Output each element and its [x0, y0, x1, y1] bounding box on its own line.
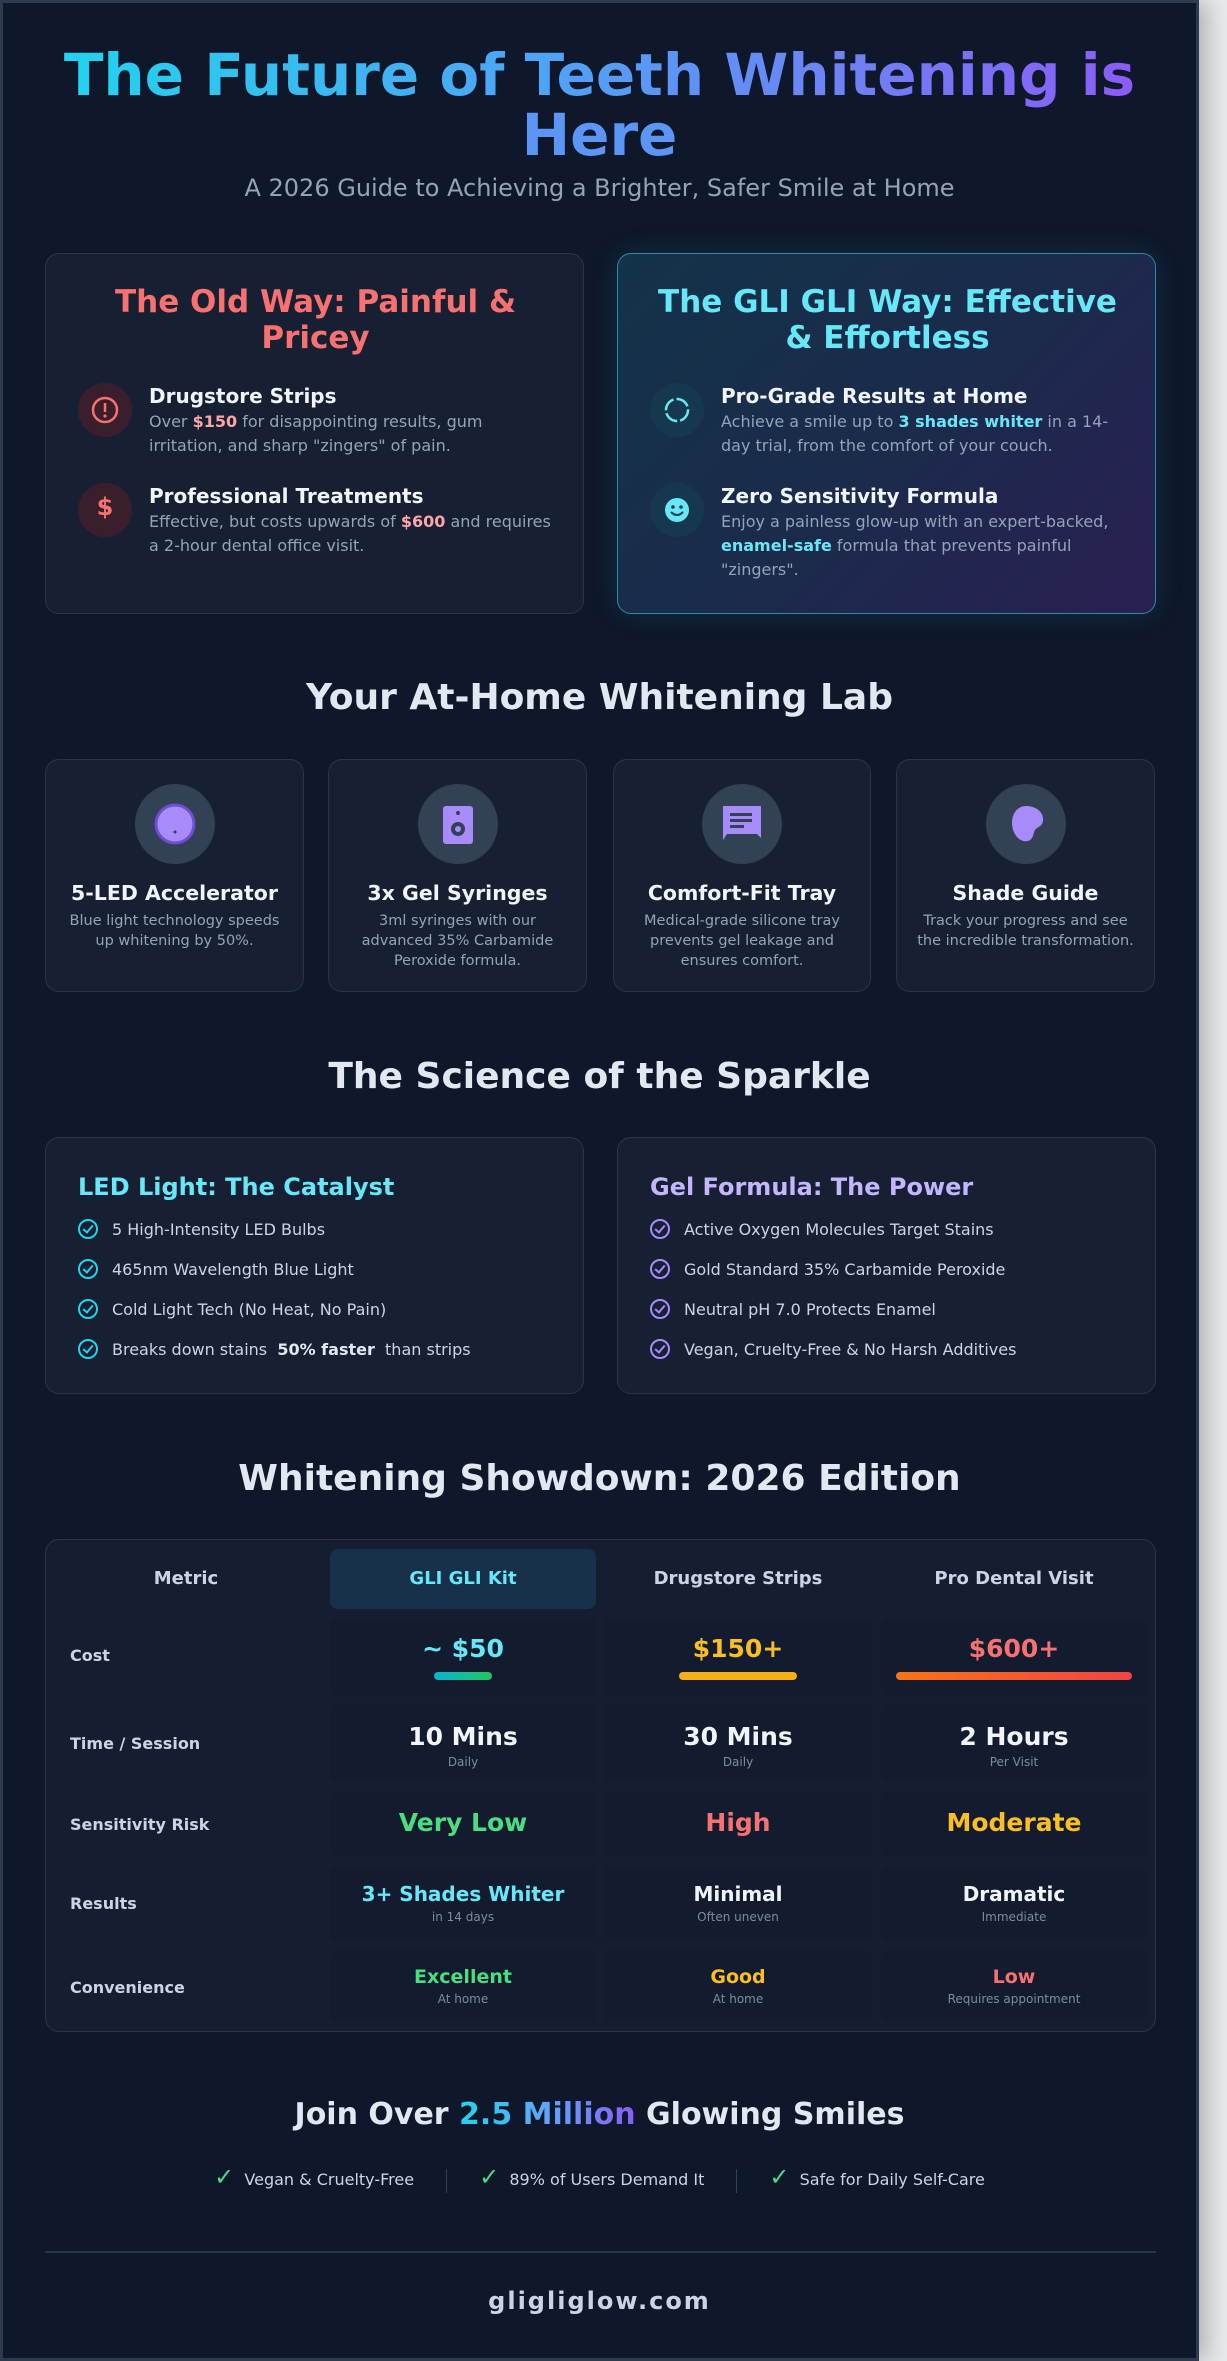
list: LED features: 5 High-Intensity LED Bulbs — [112, 1220, 325, 1239]
item: zero sensitivity: Zero Sensitivity Formula — [721, 484, 998, 508]
heading: lab: Your At-Home Whitening Lab — [306, 677, 893, 718]
row: time: 30 Mins — [683, 1722, 793, 1751]
panel: old way — [45, 253, 584, 614]
table header: GLI GLI Kit — [409, 1568, 517, 1589]
product card: syringes: 3ml syringes with our advanced 35% Carbamide Peroxide formula. — [362, 913, 553, 969]
footer url: gligliglow.com — [488, 2287, 711, 2315]
row: results: Often uneven — [697, 1910, 779, 1924]
table header — [154, 1549, 1094, 1609]
row: convenience: Requires appointment — [948, 1992, 1080, 2006]
product card: tray: Medical-grade silicone tray prevents gel leakage and ensures comfort. — [644, 913, 840, 969]
row: convenience: At home — [713, 1992, 763, 2006]
row: sensitivity: High — [705, 1808, 771, 1837]
panel: gel formula — [617, 1137, 1156, 1394]
product card: syringes: 3x Gel Syringes — [367, 881, 548, 905]
list: LED features: 465nm Wavelength Blue Light — [112, 1260, 354, 1279]
product card: shade guide: Track your progress and see the incredible transformation. — [917, 913, 1134, 949]
row: convenience: Good — [710, 1966, 766, 1988]
item: professional treatments — [149, 484, 551, 555]
icon: syringe — [418, 784, 498, 864]
title — [64, 41, 1135, 169]
product card: LED: Blue light technology speeds up whitening by 50%. — [70, 913, 279, 949]
icon: tray — [702, 784, 782, 864]
product card: LED — [45, 759, 304, 992]
list: LED features: Breaks down stains 50% faster than strips — [112, 1340, 471, 1359]
row: sensitivity — [70, 1808, 1082, 1837]
row: convenience: Low — [993, 1966, 1035, 1988]
row: results: Results — [70, 1894, 137, 1913]
row: convenience: Convenience — [70, 1978, 185, 1997]
row: sensitivity: Very Low — [399, 1808, 527, 1837]
heading: showdown: Whitening Showdown: 2026 Edition — [238, 1458, 961, 1499]
old way heading: The Old Way: Painful & — [115, 284, 516, 320]
row: cost — [70, 1634, 1132, 1680]
product card: shade guide: Shade Guide — [953, 881, 1098, 905]
icon: warning — [78, 383, 132, 437]
product card: shade guide — [896, 759, 1155, 992]
row: results: Minimal — [693, 1882, 783, 1906]
table header: Pro Dental Visit — [934, 1568, 1094, 1589]
panel: LED light — [45, 1137, 584, 1394]
row: results: in 14 days — [432, 1910, 494, 1924]
product card: LED: 5-LED Accelerator — [71, 881, 278, 905]
list: gel features: Active Oxygen Molecules Target Stains — [684, 1220, 994, 1239]
GLI heading — [658, 284, 1117, 356]
row: results: Dramatic — [963, 1882, 1065, 1906]
icon: led — [134, 784, 214, 864]
row: cost: $600+ — [969, 1634, 1059, 1663]
heading: social proof: Join Over 2.5 Million Glowing Smiles — [295, 2097, 904, 2132]
icon: money — [78, 483, 132, 537]
item: drugstore strips: Drugstore Strips — [149, 384, 337, 408]
row: convenience: Excellent — [414, 1966, 512, 1988]
row: cost: Cost — [70, 1646, 110, 1665]
item: pro-grade — [721, 384, 1108, 455]
panel: GLI GLI way — [617, 253, 1156, 614]
row: time: Daily — [723, 1755, 753, 1769]
item: drugstore strips — [149, 384, 482, 455]
list: LED features — [78, 1219, 471, 1359]
icon: refresh — [650, 383, 704, 437]
row: sensitivity: Sensitivity Risk — [70, 1815, 209, 1834]
list: LED features: Cold Light Tech (No Heat, No Pain) — [112, 1300, 386, 1319]
subtitle: A 2026 Guide to Achieving a Brighter, Safer Smile at Home — [244, 174, 955, 202]
row: convenience — [70, 1966, 1080, 2006]
product card: tray: Comfort-Fit Tray — [648, 881, 836, 905]
row: results — [70, 1882, 1065, 1924]
row: time: 10 Mins — [408, 1722, 518, 1751]
row: sensitivity: Moderate — [946, 1808, 1082, 1837]
comparison table — [45, 1539, 1156, 2032]
list: gel features — [650, 1219, 1016, 1359]
item: drugstore strips: Over $150 for disappointing results, gum irritation, and sharp "zingers" of pain. — [149, 412, 482, 455]
row: cost: $150+ — [693, 1634, 783, 1663]
icon: smile — [650, 483, 704, 537]
row: convenience: At home — [438, 1992, 488, 2006]
table header: Metric — [154, 1568, 218, 1589]
row: time: 2 Hours — [959, 1722, 1069, 1751]
old way heading — [115, 284, 516, 356]
table header: Drugstore Strips — [654, 1568, 822, 1589]
item: pro-grade: Achieve a smile up to 3 shades whiter in a 14-day trial, from the comfort of your couch. — [721, 412, 1108, 455]
title: The Future of Teeth Whitening is — [64, 41, 1135, 109]
item: pro-grade: Pro-Grade Results at Home — [721, 384, 1027, 408]
list: gel features: Vegan, Cruelty-Free & No Harsh Additives — [684, 1340, 1016, 1359]
row: time — [70, 1722, 1069, 1769]
row: cost: ~ $50 — [422, 1634, 504, 1663]
product card: syringes — [328, 759, 587, 992]
list: gel features: Gold Standard 35% Carbamide Peroxide — [684, 1260, 1005, 1279]
trust badges: ✓ Vegan & Cruelty-Free ✓ 89% of Users Demand It ✓ Safe for Daily Self-Care — [214, 2163, 985, 2191]
title: Here — [522, 101, 677, 169]
row: time: Daily — [448, 1755, 478, 1769]
row: time: Per Visit — [990, 1755, 1038, 1769]
item: zero sensitivity: Enjoy a painless glow-up with an expert-backed, enamel-safe formula that prevents painful "zingers". — [721, 512, 1108, 579]
product card: tray — [613, 759, 871, 992]
list: gel features: Neutral pH 7.0 Protects Enamel — [684, 1300, 936, 1319]
heading: science: The Science of the Sparkle — [328, 1056, 871, 1097]
row: results: 3+ Shades Whiter — [362, 1882, 564, 1906]
panel: gel formula: Gel Formula: The Power — [650, 1173, 973, 1201]
panel: LED light: LED Light: The Catalyst — [78, 1173, 394, 1201]
row: results: Immediate — [982, 1910, 1046, 1924]
GLI heading: & Effortless — [785, 320, 990, 356]
old way heading: Pricey — [261, 320, 370, 356]
row: time: Time / Session — [70, 1734, 200, 1753]
icon: money: $ — [97, 493, 113, 521]
item: professional treatments: Professional Treatments — [149, 484, 424, 508]
item: professional treatments: Effective, but costs upwards of $600 and requires a 2-hour dental office visit. — [149, 512, 551, 555]
icon: palette — [986, 784, 1066, 864]
GLI heading: The GLI GLI Way: Effective — [658, 284, 1117, 320]
